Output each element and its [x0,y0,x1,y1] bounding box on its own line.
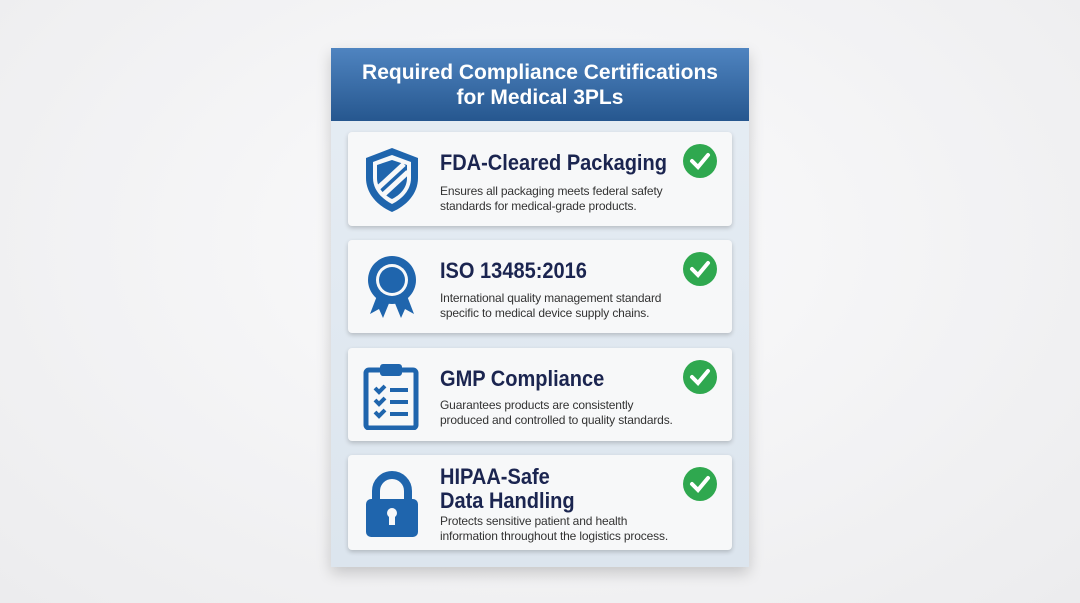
card: ISO [348,240,732,333]
description [440,291,661,320]
description [440,398,673,426]
icon: award ribbon [368,256,416,318]
card: HIPAA [348,455,732,550]
description: Guarantees products are consistently [440,398,633,412]
title [331,48,749,121]
icon: check [683,252,717,286]
description: Protects sensitive patient and health [440,514,627,528]
description: standards for medical-grade products. [440,198,637,212]
title: Required Compliance Certifications [362,61,718,84]
description: information throughout the logistics process. [440,528,668,542]
card: GMP [348,348,732,441]
heading: FDA-Cleared Packaging [440,150,667,175]
icon: check [683,144,717,178]
description: specific to medical device supply chains. [440,306,649,320]
panel: certifications [331,48,749,567]
icon: clipboard [364,364,418,430]
icon: check [683,467,717,501]
icon: check [683,360,717,394]
heading: GMP Compliance [440,366,604,391]
heading [440,464,575,513]
card: FDA [348,132,732,226]
icon: padlock [366,471,418,537]
description [440,514,668,542]
title: for Medical 3PLs [457,86,623,109]
description: International quality management standard [440,291,661,305]
heading: Data Handling [440,488,575,513]
heading: HIPAA-Safe [440,464,550,489]
description: Ensures all packaging meets federal safety [440,184,662,198]
description: produced and controlled to quality standards. [440,412,673,426]
description [440,184,663,212]
icon: shield [366,148,418,212]
heading: ISO 13485:2016 [440,258,587,283]
